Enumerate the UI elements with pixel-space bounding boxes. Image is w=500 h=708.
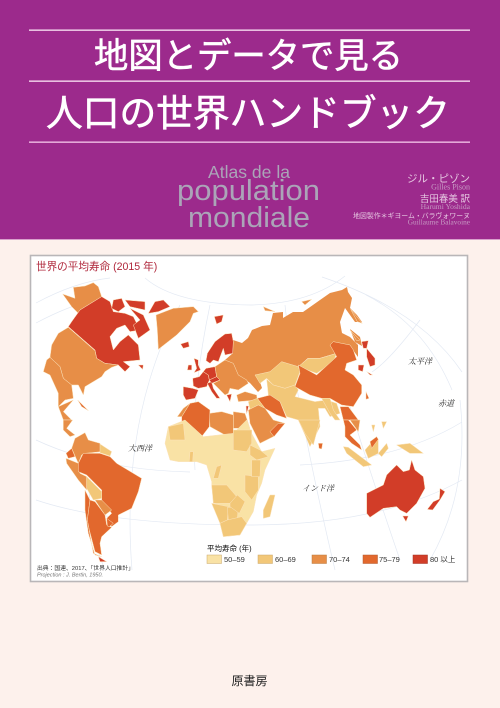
- title: 地図とデータで見る: [94, 37, 403, 76]
- source note: [37, 564, 134, 578]
- source note: Projection : J. Bertin, 1950.: [37, 572, 103, 578]
- ocean labels: 赤道: [438, 399, 456, 408]
- purple header band: [0, 0, 500, 240]
- author credits: Guillaume Balavoine: [408, 218, 470, 226]
- legend: 70–74: [329, 555, 350, 564]
- legend: [207, 543, 456, 564]
- title: 人口の世界ハンドブック: [46, 93, 450, 134]
- original French title: population: [177, 175, 320, 207]
- legend: 60–69: [275, 555, 296, 564]
- graticule: [36, 276, 462, 570]
- South America: [63, 420, 142, 562]
- ocean labels: インド洋: [302, 484, 335, 493]
- author credits: 吉田春美 訳: [420, 193, 470, 205]
- Africa: [165, 420, 275, 537]
- author credits: ジル・ピゾン: [407, 173, 470, 185]
- South-East Asia and Oceania: [298, 420, 445, 522]
- title: [46, 37, 450, 134]
- map title: 世界の平均寿命 (2015 年): [36, 260, 157, 273]
- legend: 80 以上: [430, 555, 456, 564]
- original French title: mondiale: [188, 202, 310, 234]
- source note: 出典：国連、2017、「世界人口推計」: [37, 564, 134, 572]
- legend: 50–59: [224, 555, 245, 564]
- author credits: [353, 173, 471, 226]
- author credits: Gilles Pison: [431, 182, 470, 192]
- legend: 75–79: [379, 555, 400, 564]
- legend: 平均寿命 (年): [207, 543, 252, 553]
- China, Korea, Japan, mainland South-East Asia: [263, 299, 375, 420]
- panel: world map: [30, 256, 468, 582]
- ocean labels: 太平洋: [408, 357, 433, 366]
- Europe, Middle East and Asia: [177, 333, 340, 447]
- Russia: [225, 287, 362, 392]
- publisher: 原書房: [231, 674, 268, 688]
- original French title: [177, 162, 320, 234]
- author credits: Harumi Yoshida: [421, 202, 471, 211]
- original French title: Atlas de la: [208, 162, 290, 182]
- ocean labels: [128, 357, 456, 493]
- ocean labels: 大西洋: [128, 444, 153, 453]
- author credits: 地図製作＊ギヨーム・バラヴォワーヌ: [353, 211, 470, 220]
- North America: [43, 283, 223, 420]
